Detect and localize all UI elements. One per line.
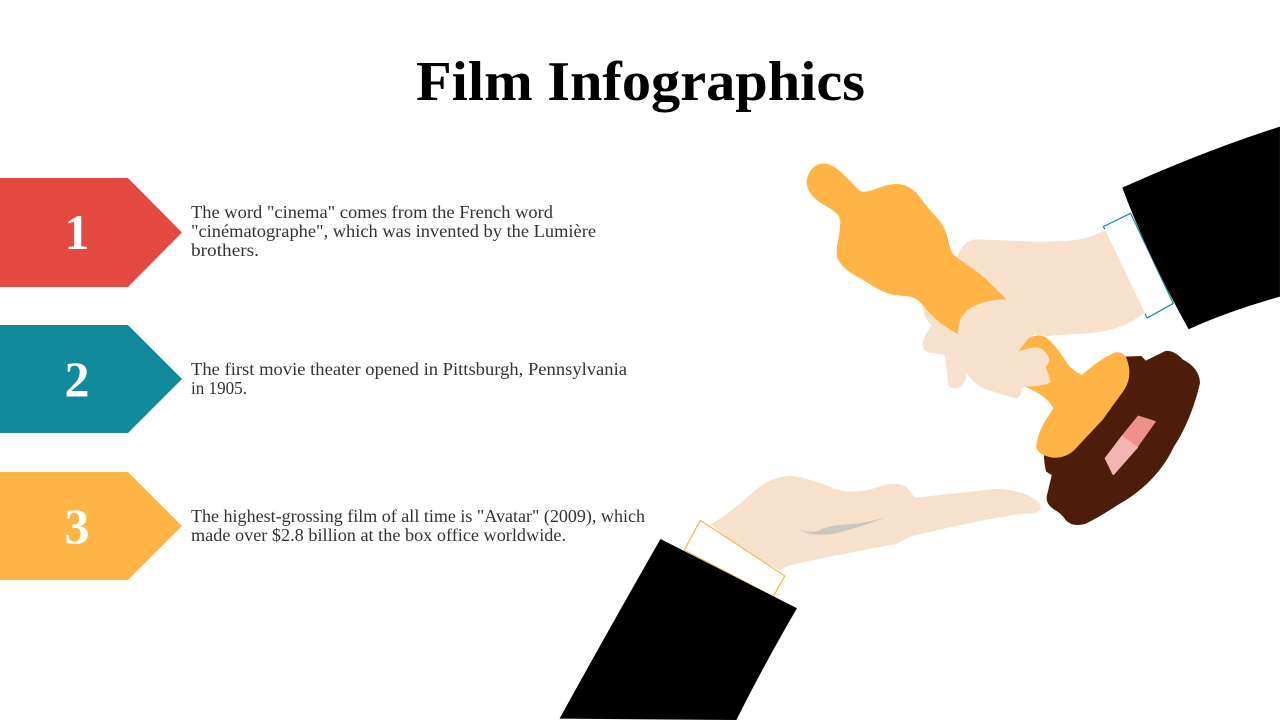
- arrow: yellow number badge: [0, 472, 182, 580]
- panel: fact 1: [0, 178, 596, 287]
- text: fact 1: brothers.: [191, 240, 259, 260]
- icon: palm crease: [799, 517, 886, 535]
- panel: fact 2: [0, 325, 627, 433]
- number 3: 3: [64, 498, 90, 554]
- icon: upper shirt cuff: [1103, 213, 1173, 318]
- icon: statuette lower body: [1017, 335, 1129, 458]
- panel: fact 3: [0, 472, 645, 580]
- icon: award base: [1044, 351, 1200, 525]
- text: fact 2: in 1905.: [191, 378, 247, 398]
- text: fact 2: The first movie theater opened in Pittsburgh, Pennsylvania: [191, 359, 627, 379]
- icon: award plaque: [1105, 416, 1155, 474]
- icon: upper black sleeve: [1122, 127, 1280, 329]
- text: fact 3: made over $2.8 billion at the box office worldwide.: [191, 525, 566, 545]
- text: fact 1: [191, 202, 596, 260]
- icon: statuette head and torso: [807, 164, 1006, 333]
- text: fact 1: "cinématographe", which was invented by the Lumière: [191, 221, 596, 241]
- icon: lower hand: [711, 476, 1041, 570]
- icon: lower black sleeve: [560, 539, 797, 720]
- number 1: 1: [64, 204, 90, 260]
- text: fact 3: [191, 506, 645, 545]
- arrow: red number badge: [0, 178, 182, 287]
- number 2: 2: [64, 351, 90, 407]
- title: Film Infographics: [416, 51, 865, 113]
- icon: upper hand: [923, 230, 1145, 398]
- icon: lower shirt cuff: [684, 520, 785, 597]
- illustration: award handover: [560, 127, 1280, 720]
- text: fact 3: The highest-grossing film of all time is "Avatar" (2009), which: [191, 506, 645, 527]
- text: fact 2: [191, 359, 627, 398]
- arrow: teal number badge: [0, 325, 182, 433]
- text: fact 1: The word "cinema" comes from the French word: [191, 202, 553, 222]
